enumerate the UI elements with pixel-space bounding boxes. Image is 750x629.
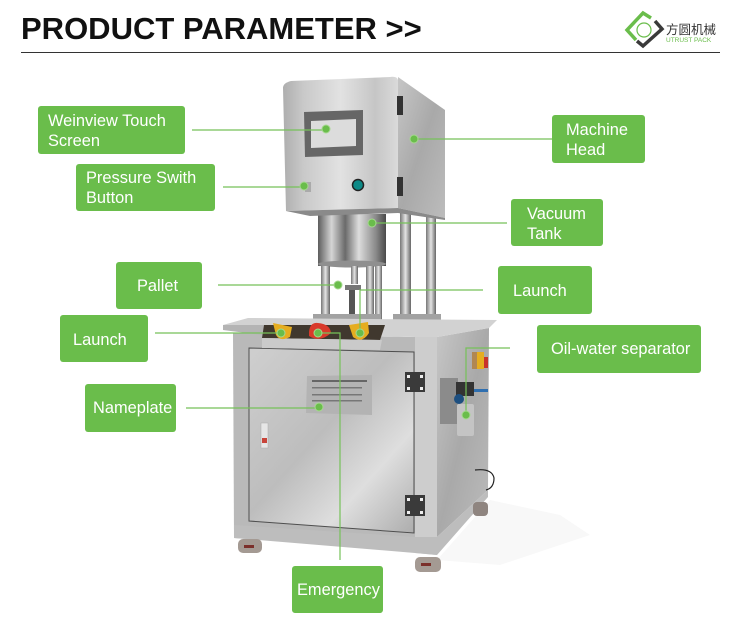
label: Oil-water separator: Oil-water separator	[551, 340, 690, 358]
label: Pallet: Pallet	[137, 277, 178, 295]
machine: columns	[313, 212, 441, 324]
label: Vacuum Tank: Vacuum Tank	[527, 205, 586, 243]
icon: switch and air filter	[440, 352, 494, 490]
label: Weinview Touch Screen: Weinview Touch Screen	[48, 112, 166, 150]
label: Emergency	[292, 566, 383, 613]
label: Nameplate	[85, 384, 176, 432]
logo icon	[627, 13, 662, 46]
title: PRODUCT PARAMETER >>	[21, 11, 422, 46]
label: Launch left: Launch	[73, 331, 127, 349]
label: Pressure Swith Button	[76, 164, 215, 211]
icon: door hinges	[405, 372, 425, 516]
logo text: 方圆机械	[666, 23, 716, 37]
machine: head box	[283, 77, 445, 220]
label: Nameplate: Nameplate	[93, 399, 172, 417]
label: Launch left	[60, 315, 148, 362]
label: Emergency: Emergency	[297, 581, 380, 599]
floor shadow	[437, 500, 590, 565]
icon: caster feet	[238, 502, 488, 572]
icon: launch and emergency buttons	[273, 322, 369, 340]
logo text: UTRUST PACK	[666, 37, 711, 44]
label: Weinview Touch Screen	[38, 106, 185, 154]
label: Oil-water separator	[537, 325, 701, 373]
nameplate	[306, 375, 372, 415]
label: Vacuum Tank	[511, 199, 603, 246]
icon: touch screen	[304, 110, 363, 157]
logo text	[666, 23, 716, 44]
label: Launch right: Launch	[513, 282, 567, 300]
label: Machine Head: Machine Head	[566, 121, 628, 159]
leader lines and dots	[155, 125, 555, 560]
label: Pallet	[116, 262, 202, 309]
header rule	[21, 52, 720, 53]
icon: pressure switch and teal button	[305, 180, 364, 192]
label: Machine Head	[552, 115, 645, 163]
label: Launch right	[498, 266, 592, 314]
machine: base cabinet	[223, 318, 497, 555]
label: Pressure Swith Button: Pressure Swith Button	[86, 169, 196, 207]
